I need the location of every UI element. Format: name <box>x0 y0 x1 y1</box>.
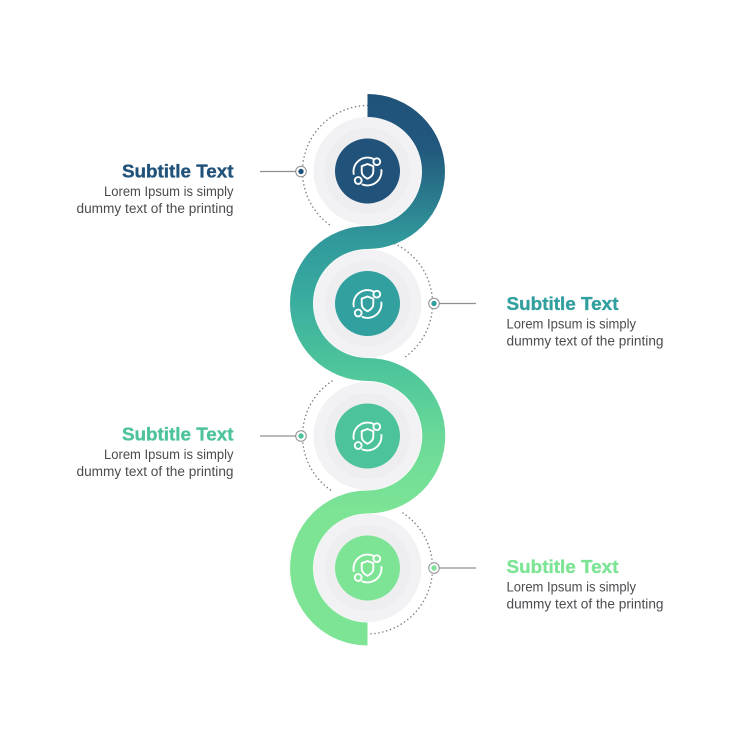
text block: step 4 <box>506 557 664 612</box>
icon: step 2 shield orbit <box>353 290 381 318</box>
text block: step 4: Lorem Ipsum is simply <box>506 580 636 594</box>
connector: step 4 <box>429 563 476 573</box>
text block: step 2: Lorem Ipsum is simply <box>506 316 636 332</box>
icon: step 1 shield orbit <box>353 158 381 185</box>
text block: step 1: dummy text of the printing <box>76 201 234 216</box>
dotted guide rings <box>302 106 433 634</box>
text block: step 1: Subtitle Text <box>122 162 234 182</box>
panel: step 3 disc <box>314 382 422 490</box>
connector: step 3 <box>260 431 306 441</box>
text block: step 4: dummy text of the printing <box>506 596 664 612</box>
icon: step 3 shield orbit <box>353 423 381 450</box>
panel: step 4 disc <box>314 514 422 622</box>
text block: step 2 <box>506 294 664 348</box>
text block: step 3: Lorem Ipsum is simply <box>104 447 234 462</box>
icon: step 4 shield orbit <box>353 555 381 582</box>
panel: step 2 disc <box>314 250 422 358</box>
text block: step 3 <box>76 424 234 479</box>
text block: step 2: Subtitle Text <box>506 294 618 314</box>
text block: step 1: Lorem Ipsum is simply <box>104 184 234 199</box>
connector: step 1 <box>260 166 306 177</box>
panel: step 1 disc <box>314 117 422 225</box>
text block: step 1 <box>76 162 234 216</box>
connector: step 2 <box>429 298 476 309</box>
text block: step 3: Subtitle Text <box>122 424 234 444</box>
text block: step 4: Subtitle Text <box>506 557 618 577</box>
text block: step 2: dummy text of the printing <box>506 334 664 348</box>
serpentine gradient ribbon <box>302 106 434 634</box>
text block: step 3: dummy text of the printing <box>76 464 234 479</box>
